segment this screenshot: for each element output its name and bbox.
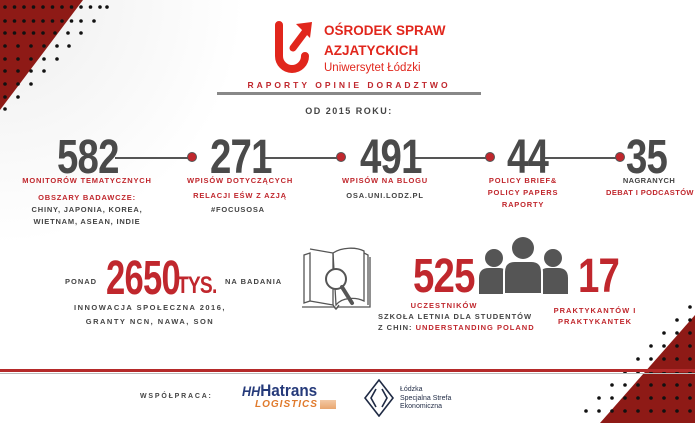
logo: LSSE: Specjalna Strefa	[400, 394, 451, 402]
label 44	[488, 176, 558, 209]
subtitle: RAPORTY OPINIE DORADZTWO	[247, 80, 451, 90]
stat 44: 44	[507, 131, 548, 184]
label 271: WPISÓW DOTYCZĄCYCH	[187, 176, 293, 185]
label participants	[378, 301, 535, 332]
label 582: MONITORÓW TEMATYCZNYCH OBSZARY BADAWCZE:	[22, 176, 152, 202]
funding stat: TYS.	[177, 272, 216, 299]
funding stat: GRANTY NCN, NAWA, SON	[86, 317, 214, 326]
funding stat: NA BADANIA	[225, 277, 282, 286]
label participants: UCZESTNIKÓW	[411, 301, 477, 310]
label 44: POLICY BRIEF&	[489, 176, 557, 185]
funding stat: INNOWACJA SPOŁECZNA 2016,	[74, 303, 226, 312]
logo text: Uniwersytet Łódzki	[324, 62, 421, 74]
label 35: NAGRANYCH	[623, 176, 675, 185]
icon: book with magnifier	[302, 248, 371, 310]
label 491: WPISÓW NA BLOGU	[342, 176, 428, 185]
stat 271: 271	[210, 131, 272, 184]
label 44: RAPORTY	[502, 200, 544, 209]
logo: Hatrans	[242, 381, 336, 410]
funding stat	[65, 252, 282, 326]
label 271: RELACJI EŚW Z AZJĄ	[193, 191, 287, 200]
label participants: SZKOŁA LETNIA DLA STUDENTÓW	[378, 312, 532, 321]
since heading: OD 2015 ROKU:	[305, 106, 393, 116]
label 35: DEBAT I PODCASTÓW	[606, 188, 694, 197]
decoration: bottom-right corner	[584, 305, 695, 423]
logo: Hatrans: HHHatrans	[242, 381, 317, 400]
icon: people group	[479, 237, 568, 294]
stat 35: 35	[626, 131, 667, 184]
label 44: POLICY PAPERS	[488, 188, 558, 197]
logo: Hatrans: LOGISTICS	[255, 399, 318, 410]
label interns: PRAKTYKANTÓW I	[554, 306, 636, 315]
stat 582: 582	[57, 131, 119, 184]
label 271	[187, 176, 293, 214]
logo text: OŚRODEK SPRAW	[324, 23, 446, 38]
logo: LSSE: Ekonomiczna	[400, 403, 442, 410]
timeline	[57, 131, 667, 184]
label 35	[606, 176, 694, 197]
label participants: Z CHIN: UNDERSTANDING POLAND	[378, 323, 535, 332]
footer divider	[0, 369, 695, 372]
funding stat: PONAD	[65, 277, 97, 286]
label 491: OSA.UNI.LODZ.PL	[346, 191, 424, 200]
icon: logo mark	[275, 21, 312, 73]
stat 525 participants: 525	[413, 250, 475, 303]
label 582: WIETNAM, ASEAN, INDIE	[34, 217, 140, 226]
logo: LSSE	[364, 379, 452, 417]
logo text: AZJATYCKICH	[324, 43, 418, 58]
logo text	[324, 22, 446, 74]
label 582: CHINY, JAPONIA, KOREA,	[32, 205, 142, 214]
stat 491: 491	[360, 131, 422, 184]
funding stat: 2650	[106, 252, 180, 305]
label 582	[22, 176, 152, 226]
decoration: top-left corner	[0, 0, 109, 111]
label interns	[554, 306, 636, 326]
logo: LSSE: Łódzka	[400, 386, 423, 393]
label interns: PRAKTYKANTEK	[558, 317, 632, 326]
footer: cooperation: WSPÓŁPRACA:	[140, 393, 213, 400]
label 271: #FOCUSOSA	[211, 205, 265, 214]
stat 17 interns: 17	[578, 250, 619, 303]
logo	[275, 21, 446, 74]
label 491	[342, 176, 428, 200]
